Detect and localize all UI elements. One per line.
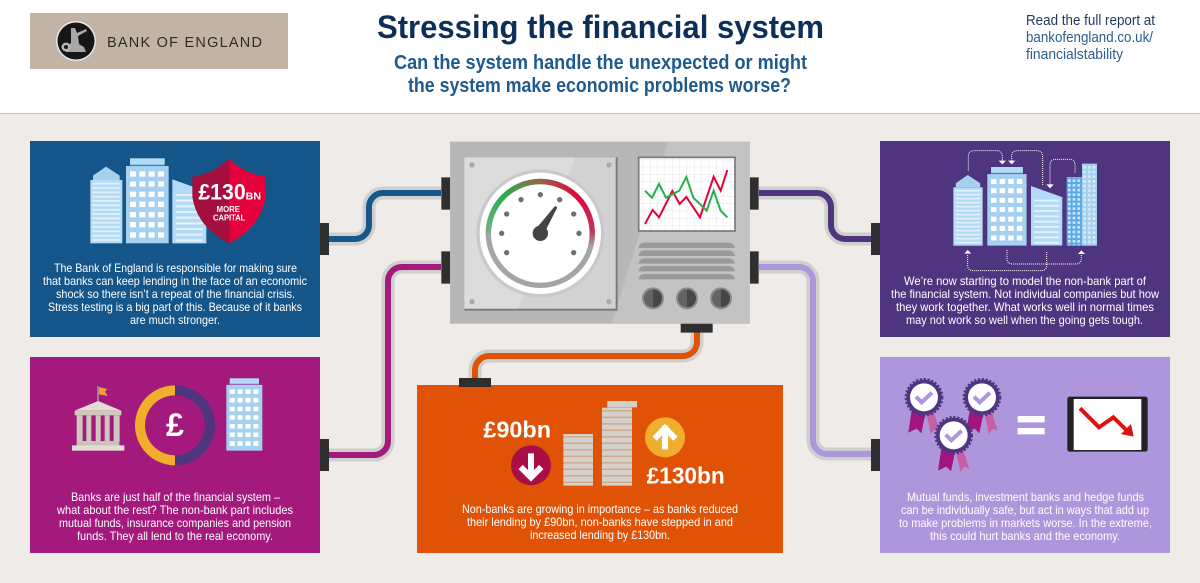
icons: bank, pound donut, tower [72,378,262,465]
text: bank capital: shock so there isn’t a repeat of the financial crisis. [56,287,295,301]
icon: rosettes equal falling chart [906,379,1148,472]
text: market behaviour: can be individually safe, but act in ways that add up [901,503,1149,517]
text: market behaviour: this could hurt banks and the economy. [930,529,1120,543]
text: half of financial system [56,490,293,543]
chart: lending stacks [483,401,725,488]
pipe: magenta [329,267,441,455]
connector: orange panel [459,378,491,387]
subtitle: the system make economic problems worse? [408,75,791,97]
text: bank capital: are much stronger. [130,313,220,327]
text: bank capital: The Bank of England is responsible for making sure [54,261,297,275]
machine connectors [441,177,759,333]
text: market behaviour: Mutual funds, investment banks and hedge funds [907,490,1144,504]
text: bank capital [43,261,307,327]
control knobs [642,287,732,309]
icon: buildings with shield [90,158,266,243]
connector: lavender panel [871,439,880,471]
text: half of financial system: Banks are just half of the financial system – [71,490,280,504]
text: market behaviour [899,490,1152,543]
stress test machine [441,142,759,333]
report link: financialstability [1026,46,1123,63]
text: market behaviour: to make problems in markets worse. In the extreme, [899,516,1152,530]
pipe: purple [759,193,871,239]
line chart screen [639,157,735,231]
icon: buildings with shield: £130 [198,179,246,204]
icon: connected buildings [953,151,1097,271]
machine body [450,142,750,324]
pipe: blue [329,193,441,239]
speaker vents [638,243,735,279]
logo: Bank of England [30,13,288,69]
header background [0,0,1200,113]
text: non-bank modelling: may not work so well when the going gets tough. [906,313,1143,327]
icons: bank, pound donut, tower: £ [166,407,184,443]
text: non-bank modelling: they work together. What works well in normal times [896,300,1154,314]
text: non-bank lending growth: their lending by £90bn, non-banks have stepped in and [467,515,733,529]
panel: half of financial system [30,357,320,553]
report link: Read the full report at [1026,12,1156,29]
icon: buildings with shield: CAPITAL [213,214,245,223]
text: non-bank modelling: We’re now starting to model the non-bank part of [904,274,1147,288]
gauge dial [476,169,604,297]
pipe: lavender [759,267,871,454]
chart: lending stacks: £90bn [483,416,551,442]
gauge needle [533,206,557,241]
text: non-bank lending growth: increased lending by £130bn. [530,528,670,542]
subtitle [394,52,807,97]
chart: lending stacks: £130bn [647,462,725,488]
icon: Britannia seal [56,21,96,61]
connector: magenta panel [320,439,329,471]
text: bank capital: Stress testing is a big part of this. Because of it banks [48,300,302,314]
subtitle: Can the system handle the unexpected or might [394,52,807,74]
connector: purple panel [871,223,880,255]
text: bank capital: that banks can keep lending in the face of an economic [43,274,307,288]
panel: market behaviour [880,357,1170,553]
connector: blue panel [320,223,329,255]
text: non-bank lending growth [462,502,738,542]
report link: bankofengland.co.uk/ [1026,29,1154,46]
text: non-bank modelling [891,274,1159,327]
icon: buildings with shield: BN [246,191,261,202]
gauge panel [464,157,618,311]
title: Stressing the financial system [377,9,824,45]
icon: buildings with shield: MORE [217,205,241,214]
panel: non-bank modelling [880,141,1170,337]
text: non-bank lending growth: Non-banks are growing in importance – as banks reduced [462,502,738,516]
panel: non-bank lending growth [417,385,783,553]
text: non-bank modelling: the financial system. Not individual companies but how [891,287,1159,301]
logo wordmark: BANK OF ENGLAND [107,35,262,51]
report link [1026,12,1156,63]
text: half of financial system: mutual funds, insurance companies and pension [59,516,291,530]
pipe: orange [475,332,697,378]
panel: bank capital [30,141,320,337]
text: half of financial system: funds. They all lend to the real economy. [77,529,273,543]
text: half of financial system: what about the rest? The non-bank part includes [56,503,293,517]
